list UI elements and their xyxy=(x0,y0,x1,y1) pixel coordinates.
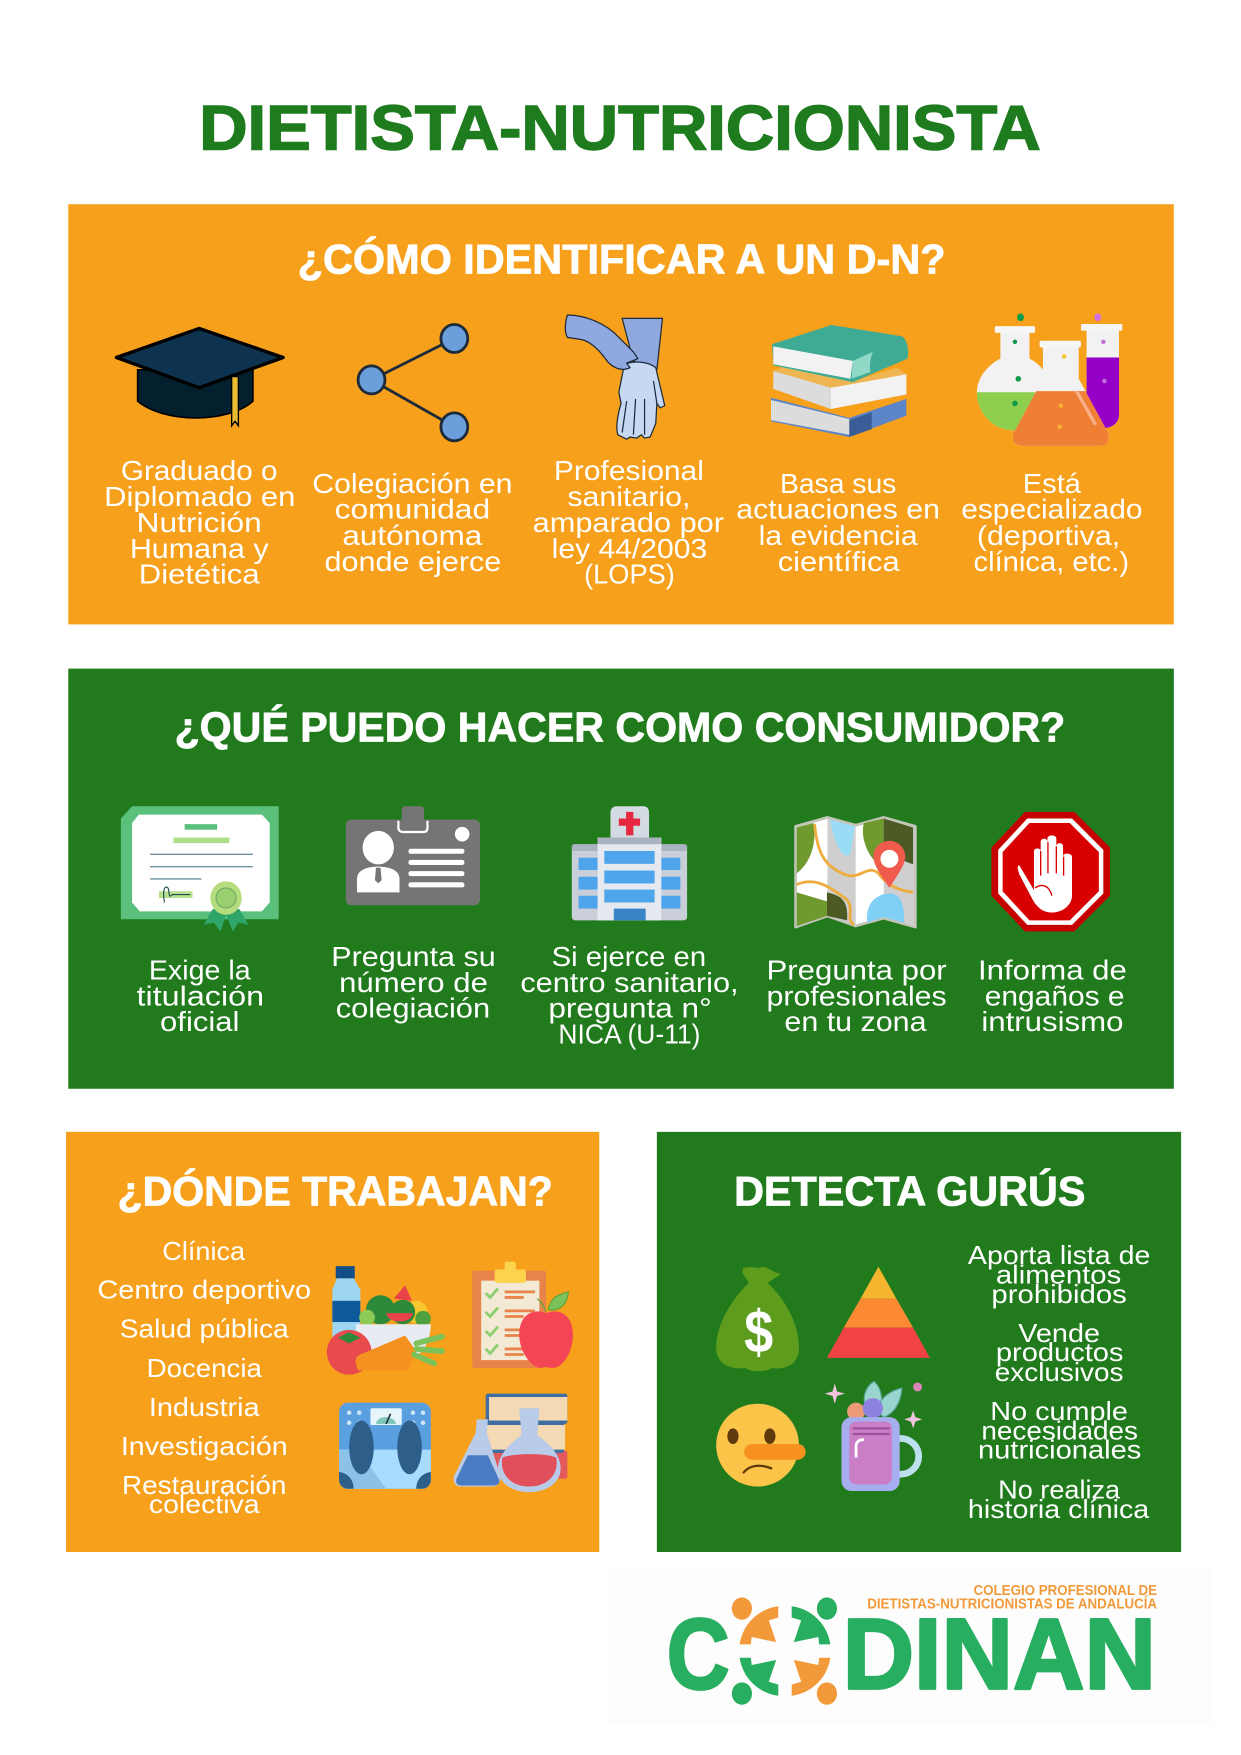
text: productos exclusivos xyxy=(995,1320,1123,1387)
list: workplaces: Centro deportivo xyxy=(97,1277,311,1305)
icon: share network xyxy=(358,325,468,441)
text: lista de alimentos: prohibidos xyxy=(991,1281,1127,1309)
text: evidencia científica: la evidencia xyxy=(759,520,918,551)
text: graduado: Nutrición xyxy=(137,507,262,538)
text: profesional sanitario: ley 44/2003 xyxy=(552,533,707,564)
text: exige titulación: oficial xyxy=(160,1006,239,1037)
icon: certificate xyxy=(121,806,279,932)
list: workplaces: Clínica xyxy=(162,1238,246,1266)
text: graduado: Diplomado en xyxy=(104,481,295,512)
text: lista de alimentos: alimentos xyxy=(996,1261,1121,1289)
icon: clipboard and apple xyxy=(472,1262,573,1368)
panel: dónde trabajan xyxy=(66,1132,599,1552)
list: workplaces: Investigación xyxy=(121,1433,288,1461)
text: profesional sanitario xyxy=(533,455,724,590)
text: especializado: especializado xyxy=(961,494,1143,525)
text: especializado: (deportiva, xyxy=(977,520,1120,551)
text: evidencia científica: actuaciones en xyxy=(736,494,940,525)
logo: CODINAN: C xyxy=(667,1599,730,1711)
icon: money bag: $ xyxy=(744,1297,773,1365)
heading: qué puedo hacer: ¿QUÉ PUEDO HACER COMO CONSUMIDOR? xyxy=(175,704,1065,750)
text: profesional sanitario: (LOPS) xyxy=(584,559,675,590)
text: profesionales en tu zona: profesionales xyxy=(767,980,947,1011)
text: NICA: pregunta n° xyxy=(548,993,712,1024)
text: historia clínica: No realiza xyxy=(998,1476,1121,1504)
text: especializado: clínica, etc.) xyxy=(974,546,1129,577)
text: graduado: Humana y xyxy=(130,533,269,564)
logo: CODINAN: COLEGIO PROFESIONAL DE xyxy=(974,1583,1157,1599)
text: necesidades nutricionales xyxy=(978,1398,1141,1465)
text: colegiación: comunidad xyxy=(335,494,490,525)
text: profesionales en tu zona xyxy=(767,955,947,1037)
text: NICA: NICA (U-11) xyxy=(558,1018,701,1049)
icon: healthy food xyxy=(327,1266,442,1375)
icon: bathroom scale xyxy=(339,1403,431,1489)
text: engaños e intrusismo: intrusismo xyxy=(981,1006,1123,1037)
icon: stack of books xyxy=(771,325,908,437)
heading: dónde trabajan: ¿DÓNDE TRABAJAN? xyxy=(118,1169,553,1215)
text: profesional sanitario: sanitario, xyxy=(567,481,690,512)
icon: medical gloves xyxy=(565,315,665,439)
icon: folded map xyxy=(796,817,915,927)
list: workplaces: Restauración xyxy=(122,1472,286,1500)
text: profesional sanitario: amparado por xyxy=(533,507,724,538)
text: historia clínica: historia clínica xyxy=(968,1496,1150,1524)
text: NICA: centro sanitario, xyxy=(520,967,739,998)
icon: ID badge xyxy=(346,806,480,905)
text: graduado: Graduado o xyxy=(121,455,278,486)
icon: laboratory flasks xyxy=(977,313,1122,446)
list: workplaces: colectiva xyxy=(149,1491,260,1519)
text: graduado xyxy=(104,455,295,590)
text: especializado: Está xyxy=(1023,468,1081,499)
text: colegiación: donde ejerce xyxy=(325,546,501,577)
text: lista de alimentos: Aporta lista de xyxy=(968,1242,1150,1270)
text: necesidades nutricionales: No cumple xyxy=(990,1398,1128,1426)
list: workplaces xyxy=(97,1238,311,1519)
logo: CODINAN: DINAN xyxy=(843,1599,1156,1711)
icon: graduation cap xyxy=(116,328,283,426)
heading: detecta gurús: DETECTA GURÚS xyxy=(734,1169,1085,1215)
logo: CODINAN xyxy=(608,1567,1212,1725)
text: número de colegiación xyxy=(331,941,496,1024)
text: historia clínica xyxy=(968,1476,1150,1524)
text: exige titulación: Exige la xyxy=(149,955,251,986)
text: NICA xyxy=(520,941,739,1049)
text: necesidades nutricionales: nutricionales xyxy=(978,1437,1141,1465)
panel: cómo identificar xyxy=(68,204,1174,624)
text: especializado xyxy=(961,468,1143,577)
list: workplaces: Salud pública xyxy=(120,1316,289,1344)
text: colegiación: autónoma xyxy=(342,520,483,551)
text: número de colegiación: Pregunta su xyxy=(331,941,496,972)
text: número de colegiación: número de xyxy=(339,967,488,998)
text: exige titulación: titulación xyxy=(137,980,264,1011)
text: exige titulación xyxy=(137,955,264,1037)
text: colegiación xyxy=(312,468,513,577)
text: número de colegiación: colegiación xyxy=(336,993,490,1024)
text: NICA: Si ejerce en xyxy=(552,941,706,972)
text: evidencia científica xyxy=(736,468,940,577)
text: productos exclusivos: Vende xyxy=(1018,1320,1100,1348)
icon: stop hand sign xyxy=(991,812,1110,932)
text: productos exclusivos: productos xyxy=(996,1339,1123,1367)
icon: books and flasks xyxy=(454,1394,567,1492)
icon: money bag xyxy=(716,1267,799,1371)
title: DIETISTA-NUTRICIONISTA xyxy=(199,93,1041,163)
text: engaños e intrusismo: Informa de xyxy=(978,955,1127,986)
text: lista de alimentos xyxy=(968,1242,1150,1309)
list: workplaces: Docencia xyxy=(147,1355,263,1383)
text: necesidades nutricionales: necesidades xyxy=(981,1418,1138,1446)
icon: food pyramid xyxy=(827,1267,930,1358)
heading: cómo identificar: ¿CÓMO IDENTIFICAR A UN D-N? xyxy=(298,237,946,283)
icon: hospital xyxy=(572,806,687,920)
text: profesionales en tu zona: Pregunta por xyxy=(767,955,947,986)
text: evidencia científica: Basa sus xyxy=(780,468,896,499)
panel: detecta gurús xyxy=(657,1132,1181,1552)
text: engaños e intrusismo: engaños e xyxy=(985,980,1125,1011)
text: graduado: Dietética xyxy=(139,559,260,590)
text: productos exclusivos: exclusivos xyxy=(995,1359,1123,1387)
logo: CODINAN: DIETISTAS-NUTRICIONISTAS DE ANDALUCÍA xyxy=(867,1596,1158,1613)
text: engaños e intrusismo xyxy=(978,955,1127,1037)
list: workplaces: Industria xyxy=(149,1394,260,1422)
icon: detox smoothie jar xyxy=(825,1381,922,1491)
panel: qué puedo hacer xyxy=(68,669,1174,1089)
text: colegiación: Colegiación en xyxy=(312,468,513,499)
icon: lying emoji xyxy=(716,1404,806,1487)
text: profesionales en tu zona: en tu zona xyxy=(784,1006,927,1037)
text: profesional sanitario: Profesional xyxy=(554,455,704,486)
text: evidencia científica: científica xyxy=(778,546,900,577)
